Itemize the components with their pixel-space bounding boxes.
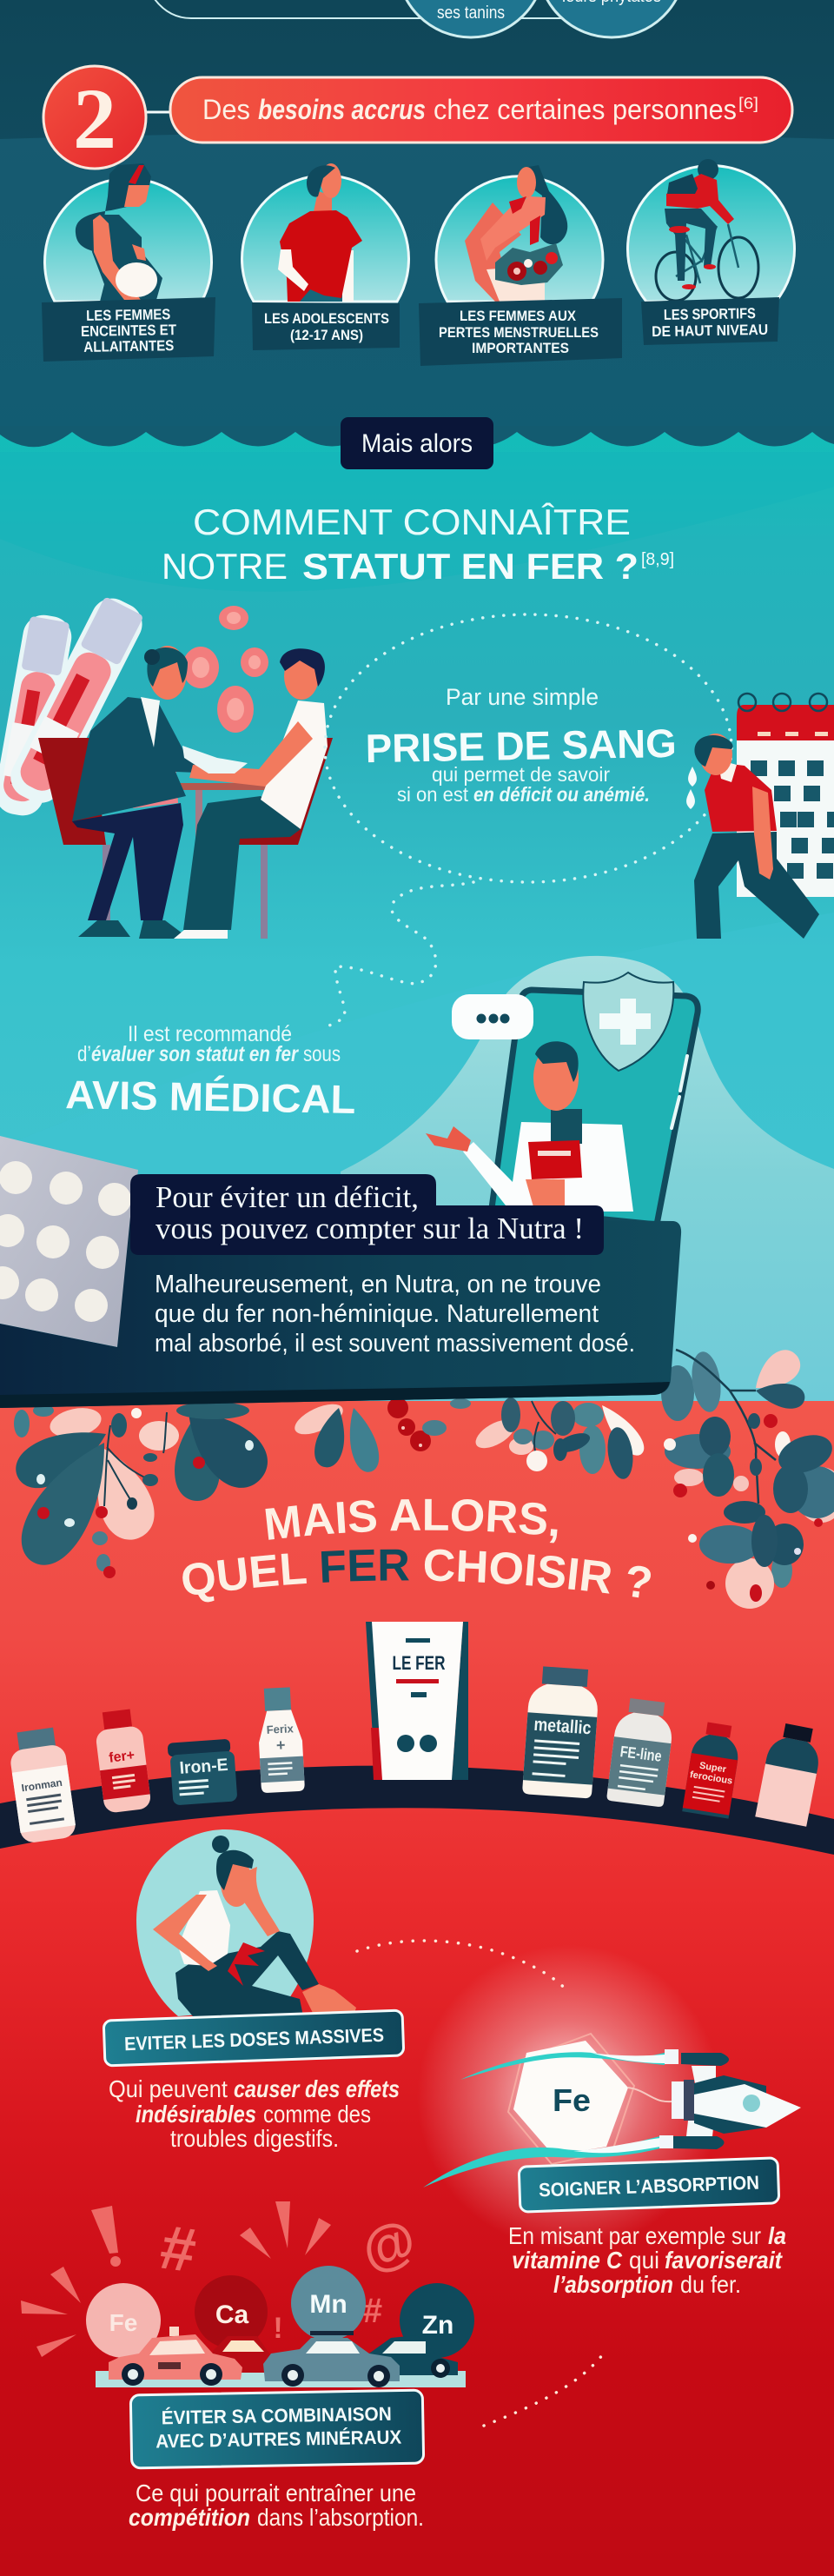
syringe <box>182 746 248 773</box>
title: quel fer choisir <box>182 1498 651 1603</box>
text: doses massives description: troubles digestifs. <box>170 2125 339 2152</box>
heading pill <box>170 77 792 143</box>
illustration: blood cells <box>182 606 268 733</box>
bubble: wine tannins <box>397 0 545 37</box>
illustration: woman with stomach ache <box>136 1829 356 2018</box>
section 2 heading <box>43 66 792 169</box>
text: avis médical: d’ <box>77 1042 91 1066</box>
text: absorption description: En misant par exemple sur <box>508 2222 761 2249</box>
bottle: le fer hero product <box>366 1622 468 1780</box>
label: heavy periods: PERTES MENSTRUELLES <box>439 324 599 341</box>
car: grey <box>263 2331 400 2387</box>
text: absorption description: du fer. <box>680 2271 741 2298</box>
title: comment connaître <box>162 501 674 587</box>
bottle: super ferocious <box>682 1720 743 1819</box>
bottle: Ferix+: + <box>275 1736 286 1754</box>
bottle: Iron-E <box>168 1738 237 1806</box>
text: combinaison description: compétition <box>129 2504 250 2531</box>
text: avis médical: évaluer son statut en fer <box>91 1042 299 1066</box>
heading pill: Des <box>202 94 250 125</box>
illustration: blister pack <box>0 1136 138 1347</box>
Fe hexagon: Fe <box>553 2082 591 2118</box>
mineral: Zn <box>400 2283 474 2358</box>
sweat drops <box>686 767 697 809</box>
heading pill: [6] <box>738 95 758 112</box>
title: comment connaître: STATUT EN FER ? <box>302 546 639 587</box>
panel heading: Pour éviter un déficit, <box>156 1180 419 1214</box>
illustration: tired man <box>686 734 819 939</box>
text: doses massives description: indésirables <box>136 2101 256 2128</box>
angry symbols: # <box>156 2213 200 2286</box>
illustration: doctor on phone <box>341 956 834 1401</box>
number badge <box>43 66 146 169</box>
phone <box>492 990 698 1225</box>
text: prise de sang: en déficit ou anémié. <box>473 783 650 806</box>
title: comment connaître: NOTRE <box>162 546 288 587</box>
bottle: fer+: fer+ <box>108 1748 136 1766</box>
text: combinaison description: dans l’absorption. <box>257 2504 424 2531</box>
panel heading: vous pouvez compter sur la Nutra ! <box>156 1212 584 1245</box>
chairs <box>38 738 333 939</box>
label: athletes <box>641 297 779 345</box>
text: combinaison description <box>129 2480 424 2531</box>
button: eviter les doses massives: EVITER LES DOSES MASSIVES <box>124 2024 384 2055</box>
portrait: woman with flowers <box>436 165 603 302</box>
background: red section <box>0 1401 834 2576</box>
portrait: cyclist <box>627 159 795 302</box>
text: absorption description <box>508 2222 786 2298</box>
button: soigner l'absorption <box>519 2158 779 2212</box>
bottle: pink unlabelled <box>755 1721 825 1827</box>
doctor <box>426 1041 633 1212</box>
speech bubble <box>452 994 533 1039</box>
label: heavy periods: LES FEMMES AUX <box>460 308 577 324</box>
label: pregnant women <box>42 297 215 362</box>
text: prise de sang: PRISE DE SANG <box>365 720 677 771</box>
label: athletes: DE HAUT NIVEAU <box>652 322 768 340</box>
bottle: Ferix+ <box>256 1687 305 1793</box>
text: absorption description: qui <box>629 2247 659 2274</box>
panel body <box>155 1271 635 1358</box>
patient <box>174 648 328 939</box>
portrait: pregnant woman <box>45 163 211 302</box>
bottle: Iron-E: Iron-E <box>179 1756 228 1778</box>
button: eviter sa combinaison <box>130 2390 424 2468</box>
label: heavy periods: IMPORTANTES <box>472 340 569 356</box>
illustration: Fe rocket <box>423 2034 801 2188</box>
text: doses massives description <box>109 2075 400 2152</box>
panel heading <box>130 1174 604 1255</box>
background: dark teal upper section <box>0 0 834 452</box>
text: doses massives description: comme des <box>263 2101 371 2128</box>
illustration: traffic jam of minerals <box>21 2201 474 2387</box>
text: avis médical: sous <box>303 1042 341 1066</box>
dotted circle <box>325 614 731 882</box>
title: quel fer choisir: MAIS ALORS, <box>265 1498 558 1544</box>
label: pregnant women: ENCEINTES ET <box>81 322 177 340</box>
number badge: 2 <box>73 70 116 167</box>
label: pregnant women: ALLAITANTES <box>83 337 174 355</box>
text: prise de sang: qui permet de savoir <box>432 763 610 786</box>
mineral: Fe <box>86 2283 161 2358</box>
bottle: ironman: Ironman <box>21 1776 63 1794</box>
foliage: right cluster <box>661 1344 834 1609</box>
bottle: FE-line: FE-line <box>619 1743 663 1765</box>
label: teenagers: (12-17 ANS) <box>290 327 363 343</box>
title: quel fer choisir: QUEL FER CHOISIR ? <box>182 1549 651 1603</box>
bottle: le fer hero product: LE FER <box>393 1652 446 1674</box>
rocket body <box>659 2049 801 2149</box>
angry symbols: ! <box>273 2312 283 2345</box>
text: avis médical <box>65 1022 356 1122</box>
text: absorption description: l’absorption <box>553 2271 673 2298</box>
panel body: Malheureusement, en Nutra, on ne trouve <box>155 1271 601 1298</box>
streaks <box>460 2052 665 2080</box>
bottle: super ferocious: Super <box>698 1761 728 1776</box>
shield <box>583 973 673 1071</box>
panel: nutra <box>0 1174 681 1408</box>
button: soigner l'absorption: SOIGNER L’ABSORPTION <box>539 2172 759 2201</box>
table <box>133 783 266 847</box>
label: teenagers: LES ADOLESCENTS <box>264 310 389 327</box>
button: eviter sa combinaison: AVEC D’AUTRES MINÉRAUX <box>156 2426 402 2452</box>
label: heavy periods <box>419 298 622 366</box>
bottle: metallic: metallic <box>533 1715 592 1738</box>
dotted connector <box>326 882 473 1027</box>
title: comment connaître: COMMENT CONNAÎTRE <box>193 501 631 542</box>
text: absorption description: vitamine C <box>512 2247 623 2274</box>
bottle: metallic <box>522 1665 600 1799</box>
tag: Mais alors: Mais alors <box>361 429 473 458</box>
bubble: phytates <box>538 0 685 37</box>
mineral: Fe: Fe <box>109 2309 137 2336</box>
car: dark <box>367 2335 458 2378</box>
bottle: Ferix+: Ferix <box>266 1722 295 1736</box>
car: taxi <box>109 2327 242 2386</box>
bottle: FE-line <box>606 1696 676 1808</box>
text: prise de sang: Par une simple <box>446 684 599 710</box>
bubble: wine tannins: ses tanins <box>437 3 505 23</box>
mineral: Mn: Mn <box>309 2290 348 2319</box>
dotted arrow to absorption <box>357 1941 569 1993</box>
nurse <box>72 646 223 939</box>
foliage: left cluster <box>8 1392 279 1578</box>
text: absorption description: la <box>768 2222 786 2249</box>
angry symbols <box>21 2201 423 2357</box>
label: athletes: LES SPORTIFS <box>664 305 756 323</box>
road <box>96 2371 466 2387</box>
mineral: Mn <box>291 2266 366 2340</box>
illustration: blood tubes <box>0 591 149 819</box>
text: avis médical: AVIS MÉDICAL <box>65 1072 356 1122</box>
tube A <box>0 612 75 819</box>
button: eviter sa combinaison: ÉVITER SA COMBINAISON <box>162 2403 392 2428</box>
bottle: super ferocious: ferocious <box>689 1769 733 1787</box>
bottle: ironman <box>7 1726 77 1844</box>
label: pregnant women: LES FEMMES <box>86 306 170 324</box>
text: prise de sang: si on est <box>397 783 469 806</box>
panel body: que du fer non-héminique. Naturellement <box>155 1300 599 1328</box>
glow behind rocket <box>417 1945 721 2249</box>
heading pill: besoins accrus <box>258 94 426 125</box>
bottle: fer+ <box>93 1708 152 1814</box>
label: teenagers <box>252 302 400 350</box>
hexagon outline <box>508 2034 634 2164</box>
car: red <box>210 2336 276 2373</box>
text: combinaison description: Ce qui pourrait entraîner une <box>136 2480 416 2506</box>
text: absorption description: favoriserait <box>665 2247 783 2274</box>
text: prise de sang <box>365 684 677 806</box>
shelf <box>0 1766 834 1855</box>
angry symbols: @ <box>354 2208 423 2282</box>
background: teal section <box>0 426 834 1408</box>
mineral: Ca: Ca <box>215 2300 248 2329</box>
pale backdrop <box>341 956 834 1401</box>
illustration: calendar <box>737 694 834 897</box>
tube B <box>3 591 149 810</box>
tag: Mais alors <box>341 417 493 469</box>
mineral: Ca <box>195 2275 268 2348</box>
top fragment of previous panel <box>149 0 685 37</box>
illustration: nurse and patient <box>38 646 333 939</box>
heading pill: chez certaines personnes <box>434 94 737 125</box>
title: comment connaître: [8,9] <box>641 550 674 569</box>
Fe hexagon <box>513 2041 628 2155</box>
text: doses massives description: causer des effets <box>234 2075 400 2102</box>
portrait: teenager <box>242 163 409 302</box>
foliage: centre cluster <box>290 1398 650 1481</box>
mineral: Zn: Zn <box>422 2311 453 2340</box>
dotted arrow upper right <box>484 2348 607 2426</box>
text: avis médical: Il est recommandé <box>128 1022 292 1046</box>
text: doses massives description: Qui peuvent <box>109 2075 228 2102</box>
angry symbols: # <box>363 2292 382 2330</box>
button: eviter les doses massives <box>103 2010 404 2066</box>
wave divider <box>0 426 834 447</box>
panel body: mal absorbé, il est souvent massivement dosé. <box>155 1330 635 1358</box>
